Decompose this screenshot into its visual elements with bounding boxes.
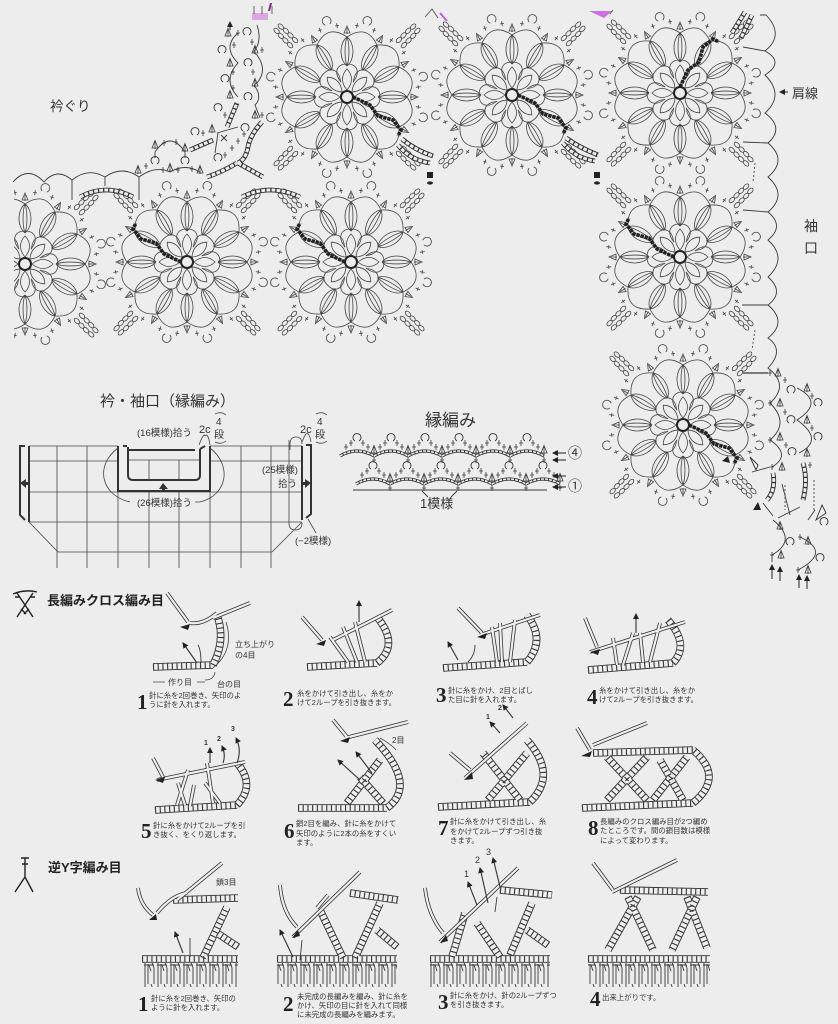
step 2 — [283, 601, 396, 711]
label: sleeve opening: 袖 — [804, 218, 818, 234]
step 4 — [585, 614, 698, 709]
step 1: 鎖3目 — [216, 877, 236, 887]
step 7: 2 — [498, 705, 502, 712]
step 7: 1 — [486, 714, 490, 721]
motif: right column bottom — [602, 344, 764, 506]
step 7: をかけて2ループずつ引き抜 — [450, 827, 543, 836]
edging title: 縁編み — [425, 411, 476, 430]
step 4: けて2ループを引き抜きます。 — [599, 695, 698, 704]
motif: second row left partial — [14, 183, 106, 345]
motif: second row centre — [106, 181, 268, 343]
thick outlines — [20, 445, 311, 522]
annotation text: (26模様)拾う — [137, 497, 192, 509]
diagram: edging chart — [340, 411, 582, 511]
step 1 — [137, 593, 275, 714]
annotation text: (16模様)拾う — [137, 427, 192, 439]
neckline edging: vertical — [214, 22, 264, 119]
step 7: きます。 — [450, 836, 479, 845]
label: shoulder line: 肩線 — [792, 86, 818, 101]
step 5: き抜く、をくり返します。 — [153, 830, 241, 839]
motif: top row right — [599, 12, 761, 174]
motif: right column middle — [599, 176, 761, 338]
base line and repeat bracket — [353, 490, 547, 497]
step 6: 矢印のように2本の糸をすくい — [296, 829, 396, 838]
step 3 — [425, 847, 557, 1014]
lower right edging — [722, 368, 828, 589]
motif: top row left — [266, 16, 428, 178]
step 3: 1 — [464, 869, 469, 879]
step 5: 2 — [217, 736, 221, 743]
label: one repeat: 1模様 — [420, 496, 453, 511]
step 4 — [588, 860, 710, 1011]
annotation text: 段 — [214, 428, 224, 441]
annotation text: (−2模様) — [295, 535, 331, 547]
step 8: 8 — [588, 816, 598, 840]
label: sleeve opening — [804, 218, 818, 256]
annotation text — [137, 413, 331, 547]
step 2: 糸をかけて引き出し、糸をか — [297, 689, 394, 698]
step 5: 3 — [231, 726, 235, 733]
step 6: 6 — [284, 819, 294, 843]
step 5: 5 — [141, 819, 152, 843]
section title: 長編みクロス編み目 — [47, 593, 164, 608]
step 1: 台の目 — [217, 679, 241, 689]
step 6: ます。 — [296, 838, 317, 847]
icon: inverted Y symbol — [15, 858, 33, 892]
grid lines — [29, 446, 302, 568]
step 2: 2 — [283, 687, 294, 711]
step 2 — [277, 872, 408, 1019]
row arrows: ④ — [568, 445, 582, 461]
schematic title: 衿・袖口（縁編み） — [100, 393, 235, 410]
label: shoulder line — [780, 86, 818, 101]
step 6: 2目 — [392, 736, 404, 745]
row arrows — [553, 445, 582, 494]
label: sleeve opening: 口 — [804, 240, 818, 256]
step 2: かけ、矢印の目に針を入れて同様 — [297, 1001, 408, 1010]
step 5: 1 — [204, 740, 208, 747]
step 3: 3 — [438, 990, 448, 1014]
connecting chains — [80, 12, 806, 500]
step 2: に未完成の長編みを編みます。 — [297, 1010, 400, 1019]
step 1: 1 — [137, 690, 148, 714]
step 1: 針に糸を2回巻き、矢印の — [151, 994, 236, 1003]
annotation text: 2c — [199, 424, 211, 436]
step 4: 糸をかけて引き出し、糸をか — [599, 686, 696, 695]
motif: second row right — [270, 181, 432, 343]
sleeve edge scallops — [742, 15, 782, 467]
section: cross double crochet stitch — [13, 591, 711, 847]
diagram: collar and cuff schematic — [20, 393, 331, 568]
step 3: 3 — [436, 683, 446, 707]
step 4: 4 — [590, 987, 601, 1011]
annotation text: 2c — [300, 424, 312, 436]
row 4 and 3 units — [340, 434, 547, 463]
label: neckline: 衿ぐり — [50, 99, 90, 114]
step 3: た目に針を入れます。 — [448, 695, 521, 704]
section title: 逆Y字編み目 — [48, 860, 122, 875]
step 6: 鎖2目を編み、針に糸をかけて — [296, 819, 396, 828]
step 3 — [436, 608, 540, 707]
motif: top row middle — [431, 14, 593, 176]
row 2 and 1 units — [356, 462, 563, 491]
step 2: 2 — [283, 992, 294, 1016]
annotation text: 拾う — [278, 478, 297, 490]
step 7: 針に糸をかけて引き出し、糸 — [450, 817, 547, 826]
step 8: たところです。間の鎖目数は模様 — [600, 826, 711, 835]
neckline edging: horizontal — [13, 124, 249, 200]
step 2: けて2ループを引き抜きます。 — [297, 698, 396, 707]
step 1: 作り目 — [168, 677, 192, 687]
annotation text: 4 — [317, 417, 323, 428]
step 7 — [438, 705, 547, 845]
step 8: によって変わります。 — [600, 836, 673, 845]
step 3: を引き抜きます。 — [450, 1000, 508, 1009]
step 1: うに針を入れます。 — [149, 700, 215, 709]
step 1: ように針を入れます。 — [151, 1003, 224, 1012]
pick-up arc annotations — [104, 434, 316, 533]
step 6 — [284, 720, 408, 847]
motif chart: crochet flower motifs — [0, 3, 828, 589]
step 4: 4 — [587, 685, 598, 709]
step 4: 出来上がりです。 — [602, 993, 660, 1002]
icon: cross stitch symbol — [13, 591, 37, 617]
annotation text: 段 — [315, 428, 325, 441]
step 1: 1 — [138, 992, 148, 1016]
step 8: 長編みのクロス編み目が2つ編め — [600, 817, 708, 826]
step 2: 未完成の長編みを編み、針に糸を — [297, 992, 408, 1001]
step 3: 針に糸をかけ、2目とばし — [448, 686, 533, 695]
annotation text: (25模様) — [262, 464, 298, 476]
step 7: 7 — [438, 816, 448, 840]
step 5: 針に糸をかけて2ループを引 — [153, 821, 245, 830]
step 3: 針に糸をかけ、針の2ループずつ — [450, 991, 557, 1000]
step 1: の4目 — [235, 651, 255, 660]
joining squares — [427, 172, 600, 185]
step 1: 針に糸を2回巻き、矢印のよ — [149, 691, 241, 700]
step 1: 立ち上がり — [235, 639, 275, 649]
step 1 — [138, 863, 238, 1016]
step 5 — [141, 726, 246, 843]
direction arrows — [20, 479, 311, 491]
row arrows: ① — [568, 478, 582, 494]
top start arrows and coloured marks — [252, 3, 613, 21]
step 3: 2 — [475, 855, 480, 865]
annotation text: 4 — [216, 417, 222, 428]
step 3: 3 — [486, 847, 491, 857]
step 8 — [577, 723, 711, 845]
section: inverted Y stitch — [15, 847, 710, 1019]
